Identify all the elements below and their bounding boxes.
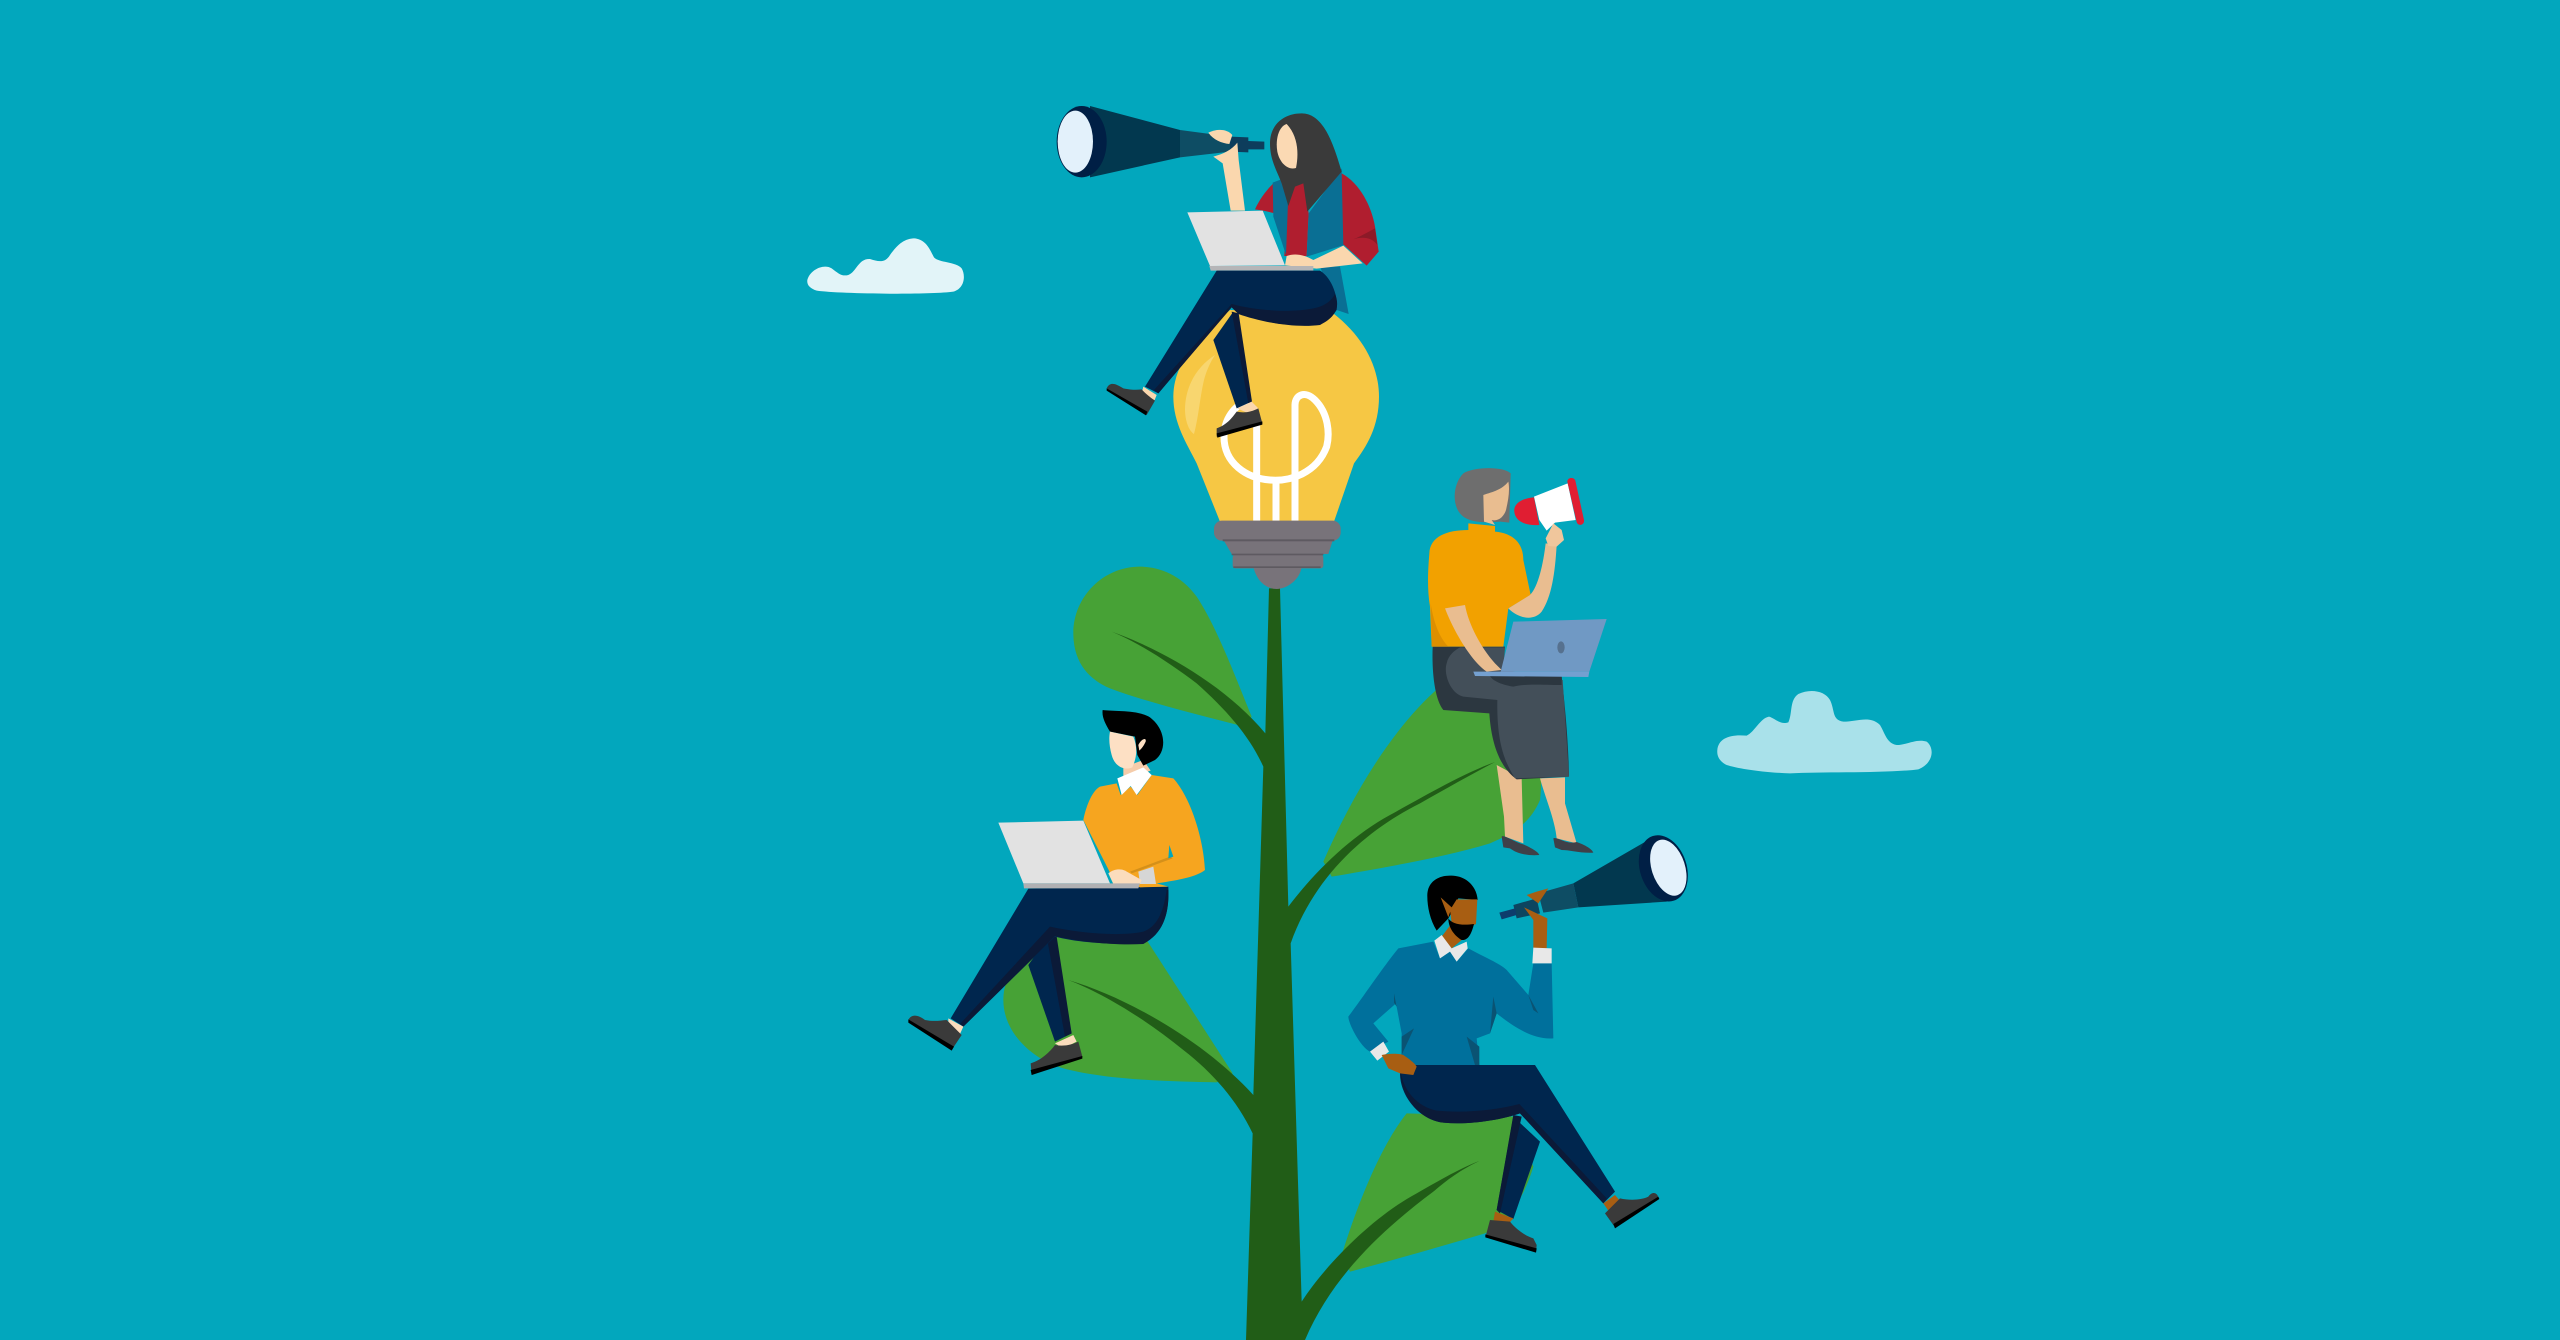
leaf: upper right — [1323, 687, 1541, 877]
hair — [1270, 113, 1342, 212]
vest — [1273, 168, 1349, 314]
far leg — [1213, 312, 1252, 408]
sweater — [1348, 942, 1553, 1065]
ankles — [1493, 1195, 1619, 1224]
ankles — [948, 1018, 1077, 1048]
right sleeve — [1342, 173, 1379, 266]
person: woman with megaphone and blue laptop — [1428, 468, 1607, 855]
neck — [1123, 760, 1151, 780]
beard — [1448, 918, 1474, 940]
hand on hip — [1382, 1054, 1417, 1075]
raised arm — [1508, 543, 1557, 618]
hand on megaphone — [1546, 523, 1564, 547]
arm on lap — [1445, 605, 1502, 672]
hair — [1102, 710, 1163, 766]
leaf: lower left — [1003, 933, 1233, 1082]
skirt — [1446, 647, 1569, 778]
near leg and hip — [951, 887, 1168, 1027]
fingers — [1208, 130, 1232, 144]
light bulb — [1173, 310, 1379, 589]
face and neck — [1483, 482, 1509, 525]
ankles — [1142, 387, 1258, 413]
shoe right — [1605, 1193, 1658, 1227]
hair — [1427, 876, 1478, 931]
shoe left — [1486, 1220, 1537, 1252]
person: woman with telescope and laptop on the bulb — [1057, 106, 1379, 438]
screw base — [1214, 521, 1341, 589]
forearm — [1285, 246, 1363, 269]
far leg — [1540, 777, 1577, 843]
megaphone — [1514, 478, 1584, 531]
laptop — [1187, 211, 1313, 271]
blouse — [1428, 523, 1531, 647]
shirt centre — [1284, 183, 1309, 256]
ear — [1138, 739, 1146, 751]
neck — [1442, 923, 1462, 948]
pants — [1400, 1065, 1615, 1203]
shoe right — [1217, 408, 1262, 437]
hand — [1108, 869, 1142, 884]
filament — [1224, 395, 1328, 521]
collar — [1117, 767, 1152, 795]
raised forearm and hand — [1524, 888, 1548, 948]
person: man with telescope on lower right leaf — [1348, 829, 1696, 1253]
telescope — [1499, 829, 1696, 919]
shoe right — [1031, 1042, 1082, 1075]
sweater — [1083, 775, 1205, 887]
raised arm and palm — [1213, 143, 1245, 211]
plant: stem and leaves — [1003, 567, 1541, 1340]
bulb highlight — [1185, 355, 1215, 434]
cuff — [1138, 867, 1156, 884]
shoe left — [1107, 384, 1155, 415]
shoes — [1502, 836, 1593, 855]
face — [1441, 897, 1477, 930]
face — [1109, 732, 1136, 769]
skirt shadow under laptop — [1490, 676, 1562, 687]
near leg — [1497, 765, 1523, 843]
laptop — [998, 821, 1140, 888]
shoe left — [908, 1016, 962, 1050]
stem with branches — [1068, 588, 1495, 1340]
near leg and hip — [1145, 271, 1337, 393]
collar — [1434, 935, 1468, 962]
person: man with orange sweater and laptop on left leaf — [908, 710, 1205, 1075]
far leg — [1497, 1117, 1540, 1219]
bulb glass — [1173, 310, 1379, 522]
hair — [1455, 468, 1511, 523]
face — [1277, 124, 1297, 168]
far leg — [1028, 937, 1072, 1042]
telescope — [1057, 106, 1264, 177]
leaf: lower right — [1342, 1113, 1533, 1272]
leaf: top left — [1073, 567, 1252, 727]
cloud: large right — [1717, 691, 1932, 773]
cloud: small left — [807, 238, 964, 294]
blue laptop — [1473, 619, 1607, 677]
cuffs — [1370, 948, 1552, 1061]
skirt shadow — [1432, 647, 1569, 779]
left sleeve — [1255, 183, 1275, 213]
